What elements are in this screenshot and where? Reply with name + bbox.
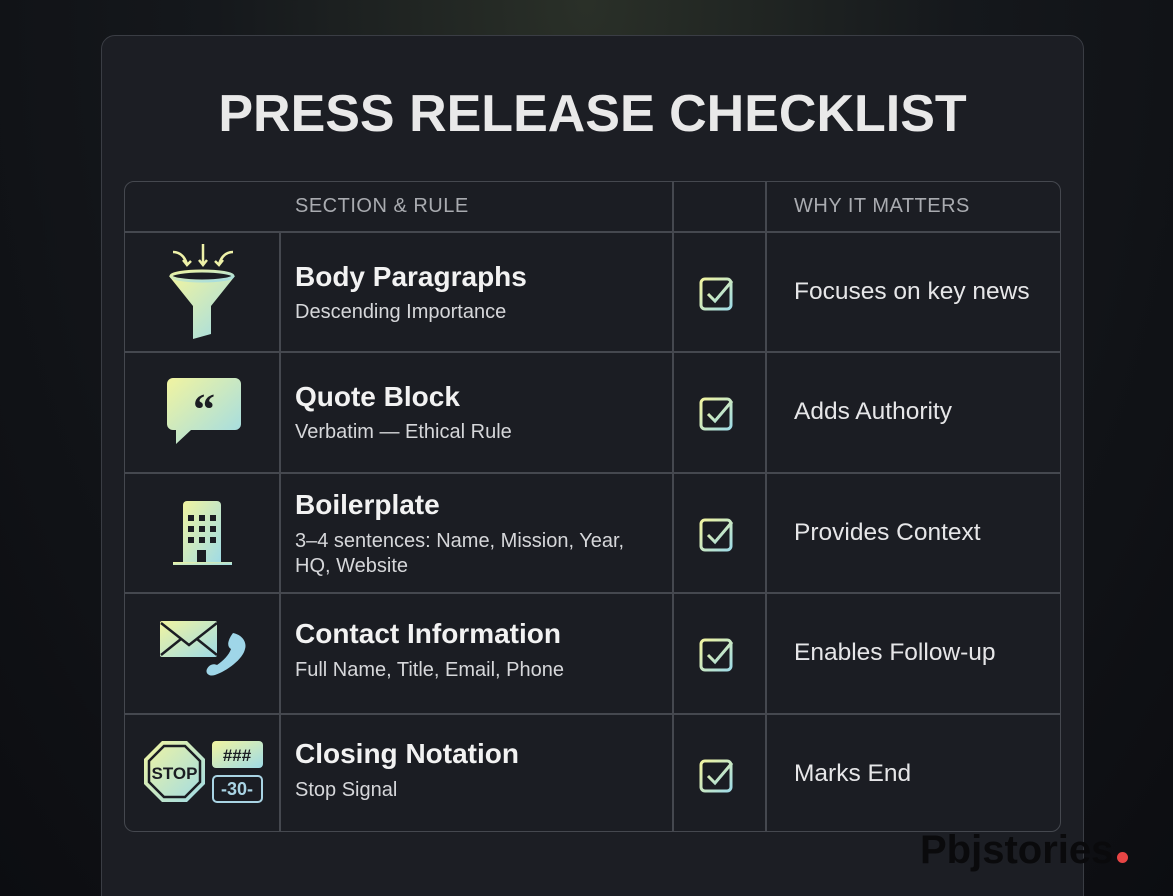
row: contact information [160, 618, 996, 681]
row: body paragraphs [169, 244, 1030, 339]
row: quote block: Quote Block [295, 381, 460, 412]
row: contact information: Full Name, Title, Email, Phone [295, 659, 564, 681]
row: boilerplate: 3–4 sentences: Name, Mission, Year, [295, 530, 624, 552]
row: boilerplate: Provides Context [794, 519, 981, 546]
row: body paragraphs: Descending Importance [295, 301, 506, 323]
check [700, 518, 734, 552]
table [124, 181, 1061, 832]
row: closing notation [144, 738, 911, 803]
row: closing notation: Stop Signal [295, 779, 397, 801]
check [700, 398, 734, 430]
row: body paragraphs: Focuses on key news [794, 278, 1030, 305]
row: quote block: Verbatim — Ethical Rule [295, 421, 512, 443]
title: PRESS RELEASE CHECKLIST [218, 85, 967, 143]
check [700, 760, 734, 792]
row: contact information: Enables Follow-up [794, 639, 996, 666]
icon: quote bubble [167, 378, 241, 444]
icon: building [173, 501, 232, 565]
row: closing notation: Closing Notation [295, 738, 519, 769]
icon: stop sign and ### -30-: STOP [152, 764, 197, 783]
watermark: Pbjstories [920, 828, 1113, 872]
row: contact information: Contact Information [295, 618, 561, 649]
row: quote block [167, 378, 952, 444]
check [700, 278, 734, 310]
row: closing notation: Marks End [794, 760, 911, 787]
icon: quote bubble: “ [193, 385, 215, 434]
icon: stop sign and ### -30- [144, 741, 263, 803]
header: why it matters: WHY IT MATTERS [794, 195, 970, 217]
row: quote block: Adds Authority [794, 398, 952, 425]
row: boilerplate [173, 489, 981, 577]
icon: envelope and phone [160, 621, 246, 676]
icon: stop sign and ### -30-: ### [223, 746, 252, 765]
row: boilerplate: Boilerplate [295, 489, 440, 520]
row: body paragraphs: Body Paragraphs [295, 261, 527, 292]
header: section & rule: SECTION & RULE [295, 195, 469, 217]
icon: funnel [169, 244, 235, 339]
check [700, 638, 734, 672]
row: boilerplate: HQ, Website [295, 555, 408, 577]
icon: stop sign and ### -30-: -30- [221, 779, 253, 799]
